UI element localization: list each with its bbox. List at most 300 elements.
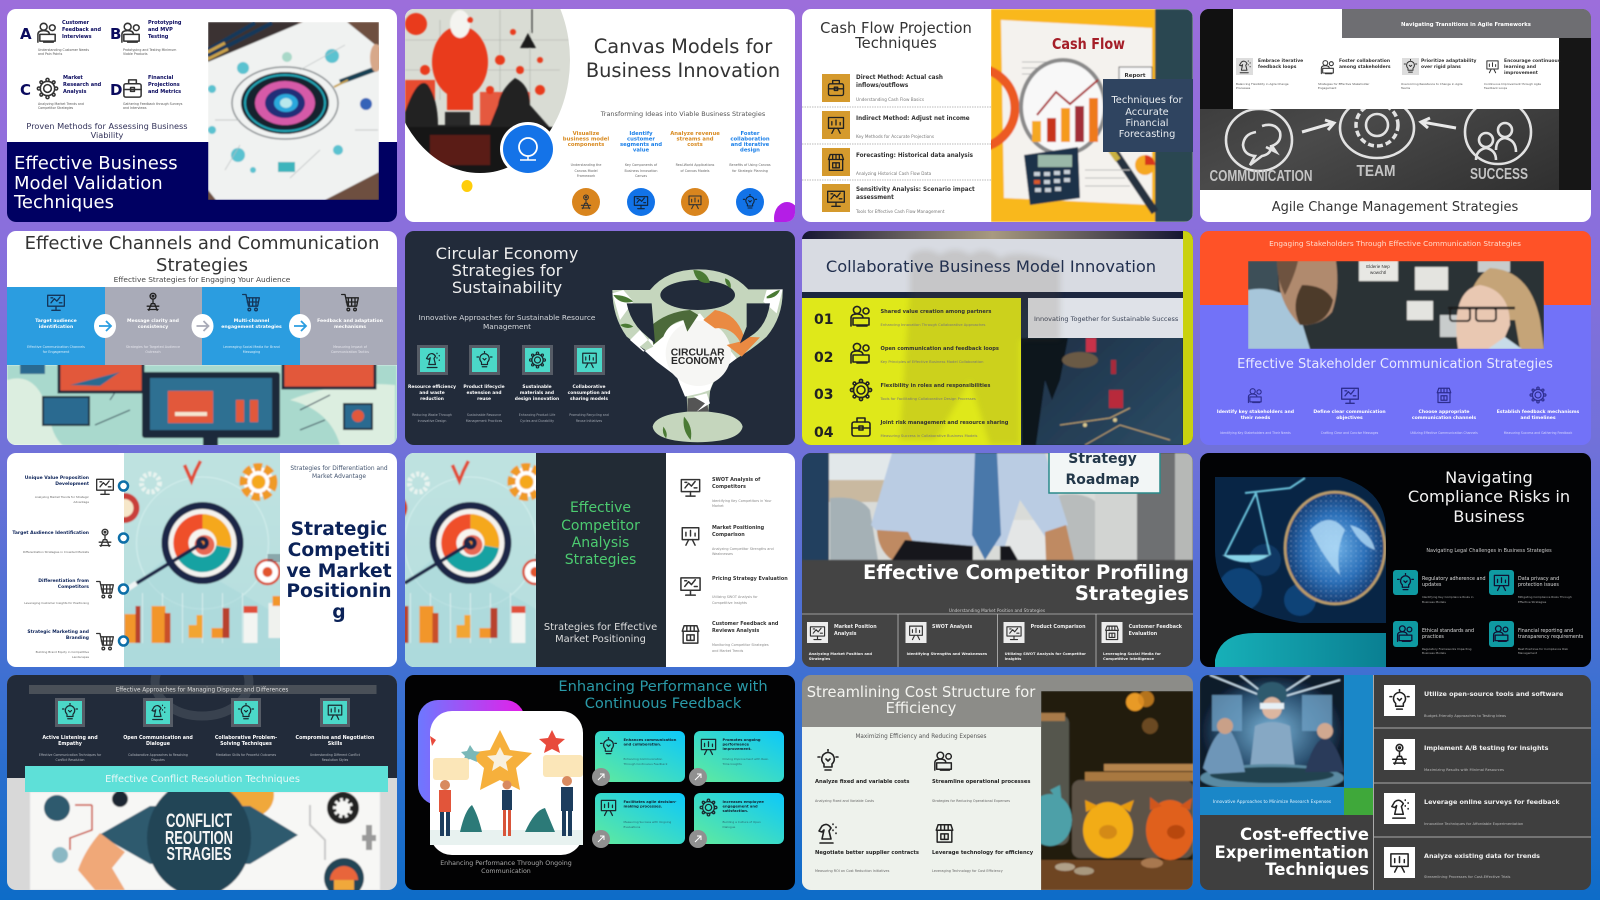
column: analyze: of Canvas Models: [680, 169, 710, 173]
option D: and Metrics: [148, 89, 181, 95]
caption: Communication: [481, 868, 531, 875]
chart heading: Cash Flow: [1052, 35, 1125, 53]
card: increases engagement: Dialogue: [722, 825, 736, 829]
chart: circular economy trophy: [612, 269, 783, 442]
title: Agile Change Management Strategies: [1272, 200, 1519, 215]
column: product comparison: Insights: [1005, 657, 1022, 661]
item: ethical standards: practices: [1422, 634, 1444, 640]
option C: Research and: [63, 82, 102, 88]
item: regulatory adherence: Business Models: [1422, 600, 1446, 604]
item: prioritize adaptability: [1400, 58, 1477, 90]
callout box: Financial: [1126, 118, 1168, 129]
item: product lifecycle: Management Practices: [466, 419, 503, 423]
item: financial reporting: transparency requirements: [1518, 634, 1584, 640]
row 03: Flexibility in roles and responsibilities: [880, 383, 990, 389]
column: analyze: [670, 131, 720, 216]
subtitle: Market Positioning: [555, 634, 646, 645]
item: data privacy: Effective Strategies: [1518, 600, 1547, 604]
title: Competiti: [288, 540, 390, 561]
poster headline: CONFLICT: [166, 811, 232, 832]
item: active listening: Empathy: [58, 741, 83, 747]
item: target audience: Target Audience Identification: [12, 530, 89, 536]
title: Effective Channels and Communication: [25, 233, 379, 254]
item: open communication: [123, 698, 193, 762]
item: market positioning: Analyzing Competitor Strengths and: [712, 547, 774, 551]
row 03: Tools for Facilitating Collaborative Design Processes: [880, 397, 976, 401]
chart: circular economy trophy: CIRCULAR: [671, 347, 725, 358]
column: analyze: Real-World Applications: [676, 163, 714, 167]
column: visualize: [563, 131, 609, 216]
blue side column: [1344, 675, 1374, 788]
option A: A: [20, 25, 32, 43]
item: embrace feedback: Embrace iterative: [1258, 59, 1303, 64]
item: strategic marketing: Branding: [66, 635, 89, 641]
option B: [110, 20, 182, 56]
item: leverage technology: [932, 825, 1034, 873]
dark top section: [7, 675, 397, 778]
subtitle: Management: [483, 322, 531, 331]
callout: strategy roadmap: Strategy: [1068, 451, 1137, 467]
item: identify: Identifying Key Stakeholders and Their Needs: [1220, 431, 1291, 435]
chalk words: COMMUNICATION: [1210, 168, 1312, 185]
item: target audience: Differentiation Strategies in Crowded Markets: [23, 550, 89, 554]
callout: strategy roadmap: Roadmap: [1066, 472, 1139, 488]
title: g: [332, 602, 346, 623]
item: pricing: Utilizing SWOT Analysis for: [712, 595, 758, 599]
card: facilitates decision-making: Measuring Success with Ongoing: [624, 820, 671, 824]
photo: chalkboard communication team success: [1200, 9, 1591, 190]
panel: cost-effective experimentation techniques: [1200, 675, 1591, 890]
item: swot: [681, 477, 772, 508]
title: Strategies: [565, 552, 636, 568]
item: establish: Measuring Success and Gathering Feedback: [1504, 431, 1572, 435]
item: define: Crafting Clear and Concise Messages: [1321, 431, 1379, 435]
card: facilitates decision-making: Facilitates agile decision-: [624, 800, 676, 804]
item: resource efficiency: and waste: [419, 390, 445, 396]
panel: effective competitor analysis strategies: [377, 448, 795, 673]
item: customer feedback: Reviews Analysis: [712, 628, 759, 634]
title: Sustainability: [452, 278, 562, 297]
item: embrace feedback: feedback loops: [1258, 64, 1297, 70]
card: increases engagement: Increases employee: [722, 800, 764, 804]
item: analyze costs: Analyze fixed and variable costs: [815, 779, 909, 785]
row: forecasting: Forecasting: Historical data analysis: [856, 153, 974, 159]
item: customer feedback: Monitoring Competitor Strategies: [712, 643, 769, 647]
panel: effective competitor profiling strategies: [802, 450, 1193, 667]
illustration: team around a star: [430, 711, 583, 855]
item: sustainable materials: Cycles and Durability: [520, 419, 554, 423]
item: analyze data: Streamlining Processes for Cost-Effective Trials: [1424, 875, 1511, 879]
poster headline: STRAGIES: [166, 844, 232, 864]
photo: scales and digital globe: [1215, 477, 1386, 623]
row: forecasting: Analyzing Historical Cash Flow Data: [856, 171, 932, 176]
item: regulatory adherence: updates: [1422, 582, 1442, 588]
step: message clarity: Strategies for Targeted Audience: [126, 345, 180, 349]
photo: target sketch on paper: [208, 22, 382, 200]
item: resource efficiency: [408, 345, 456, 423]
subtitle: Effective Strategies for Engaging Your Audience: [114, 275, 291, 284]
panel: effective business model validation techniques: [7, 9, 397, 222]
step: message clarity: Outreach: [145, 350, 161, 354]
row: forecasting: [822, 148, 974, 176]
header band: [1342, 9, 1591, 38]
item: online surveys: Leverage online surveys for feedback: [1424, 798, 1560, 806]
option B: and MVP: [148, 27, 173, 33]
item: collaborative problem solving: [215, 698, 277, 757]
item: negotiate contracts: Negotiate better supplier contracts: [815, 850, 919, 856]
title: Experimentation: [1214, 843, 1369, 862]
item: continuous learning: Encourage continuous: [1504, 59, 1560, 64]
option B: B: [110, 25, 121, 43]
item: collaborative consumption: [568, 345, 610, 423]
panel: circular economy strategies: [405, 231, 795, 445]
title: Business Innovation: [586, 59, 780, 82]
item: collaborative problem solving: Solving Techniques: [220, 741, 272, 747]
item: streamline operations: Streamline operational processes: [932, 779, 1030, 785]
board note text: Elderie Nep: [1366, 264, 1390, 269]
item: sustainable materials: materials and: [520, 390, 554, 396]
crowd silhouette overlay: [900, 250, 1060, 445]
item: open-source tools: [1384, 685, 1564, 718]
card: increases engagement: satisfaction.: [722, 809, 749, 813]
item: establish: Establish feedback mechanisms: [1497, 410, 1579, 415]
item: sustainable materials: Sustainable: [522, 385, 552, 390]
option B: Prototyping: [148, 20, 181, 26]
photo: businessman leaning on a table: [802, 453, 1193, 560]
item: analyze costs: [815, 749, 909, 803]
accent: purple corner: [774, 202, 795, 222]
card: facilitates decision-making: making processes.: [624, 804, 663, 808]
title: Cost-effective: [1240, 825, 1369, 844]
item: prioritize adaptability: Prioritize adaptability: [1421, 59, 1476, 64]
column: market position: Analysis: [834, 631, 857, 637]
card: promotes improvement: Promotes ongoing: [722, 738, 761, 742]
row 03: 03: [814, 387, 833, 403]
title: Collaborative Business Model Innovation: [826, 257, 1156, 276]
item: product lifecycle: Product lifecycle: [463, 385, 505, 390]
item: product lifecycle: [463, 345, 505, 423]
row 01: Shared value creation among partners: [880, 309, 991, 315]
item: define: objectives: [1336, 415, 1363, 421]
item: ab testing: Implement A/B testing for insights: [1424, 744, 1549, 752]
title: Model Validation: [14, 173, 163, 194]
column: market position: Strategies: [809, 657, 831, 661]
option D: D: [110, 81, 122, 99]
item: financial reporting: [1489, 621, 1584, 655]
title: Positionin: [286, 581, 392, 602]
title: Enhancing Performance with: [558, 678, 768, 695]
column: identify: Business Innovation: [624, 169, 658, 173]
item: define: Define clear communication: [1313, 410, 1386, 415]
row: sensitivity analysis: assessment: [856, 195, 894, 201]
header band: Navigating Transitions in Agile Frameworks: [1401, 22, 1531, 28]
card: enhances communication: Enhances communication: [624, 738, 676, 742]
card: promotes improvement: [689, 731, 784, 786]
caption: Enhancing Performance Through Ongoing: [440, 860, 572, 867]
title: Techniques: [13, 192, 114, 213]
card: promotes improvement: Time Insights: [722, 762, 742, 766]
step: target audience: Target audience: [35, 319, 77, 324]
row 02: 02: [814, 350, 833, 366]
item: product lifecycle: reuse: [477, 396, 491, 402]
row: direct method: [822, 74, 943, 102]
item: sustainable materials: [515, 345, 559, 423]
card: facilitates decision-making: Evaluations: [624, 825, 641, 829]
card: increases engagement: [689, 793, 784, 848]
item: product lifecycle: Sustainable Resource: [467, 413, 501, 417]
subtitle: Strategies for Differentiation and: [290, 466, 388, 472]
illustration: red bulb and team: [405, 9, 570, 173]
column: swot: [906, 622, 988, 656]
step: target audience: identification: [39, 324, 73, 330]
illustration: target and bars: [110, 448, 292, 673]
item: continuous learning: [1484, 58, 1561, 90]
card: promotes improvement: Driving Improvement with Real-: [722, 757, 769, 761]
item: embrace feedback: [1236, 58, 1303, 90]
column: analyze: streams and: [676, 136, 714, 142]
column: customer feedback: [1102, 622, 1183, 661]
item: streamline operations: Strategies for Reducing Operational Expenses: [932, 799, 1010, 803]
column: visualize: business model: [563, 136, 609, 142]
option D: Financial: [148, 75, 173, 81]
column: identify: value: [633, 148, 650, 154]
tagline box: Innovating Together for Sustainable Success: [1034, 315, 1179, 323]
option A: [20, 20, 101, 56]
title: Strategic: [291, 519, 387, 540]
option A: Feedback and: [62, 27, 101, 33]
column: visualize: components: [568, 142, 604, 148]
title: Efficiency: [886, 700, 957, 717]
item: market positioning: [682, 525, 774, 556]
item: embrace feedback: Balancing Flexibility in Agile Change: [1236, 82, 1289, 86]
blue caption band: [1200, 787, 1344, 815]
item: market positioning: Market Positioning: [712, 525, 764, 531]
option D: and Interviews: [123, 106, 147, 110]
item: pricing: Pricing Strategy Evaluation: [712, 576, 788, 582]
item: regulatory adherence: [1393, 570, 1486, 604]
item: open-source tools: Budget-Friendly Approaches to Testing Ideas: [1424, 714, 1506, 718]
title: Business: [1453, 507, 1525, 526]
item: online surveys: [1384, 793, 1560, 826]
item: unique value proposition: Analyzing Market Trends for Strategic: [35, 495, 89, 499]
photo: cash flow report and magnifier: [991, 9, 1193, 222]
illustration: target and bars: [377, 448, 560, 673]
title: Strategies for: [452, 261, 563, 280]
column: product comparison: Product Comparison: [1031, 624, 1086, 630]
column: market position: Market Position: [834, 625, 877, 630]
row: direct method: Understanding Cash Flow Basics: [856, 97, 924, 102]
poster headline: [165, 811, 233, 864]
item: differentiation: Competitors: [58, 584, 89, 590]
blue caption band: Innovative Approaches to Minimize Research Expenses: [1213, 799, 1332, 805]
subtitle: Maximizing Efficiency and Reducing Expenses: [856, 734, 987, 740]
title: Techniques: [854, 35, 937, 52]
row: indirect method: [822, 111, 970, 139]
item: choose: Choose appropriate: [1418, 410, 1470, 415]
item: strategic marketing: [27, 629, 128, 659]
item: prioritize adaptability: Teams: [1400, 86, 1411, 90]
item: ab testing: Maximizing Results with Minimal Resources: [1424, 768, 1504, 772]
illustration: conflict resolution poster: [30, 773, 380, 898]
column: customer feedback: Evaluation: [1129, 631, 1158, 637]
option B: Viable Products: [123, 52, 148, 56]
item: active listening: Active Listening and: [42, 736, 98, 741]
report tag: Report: [1124, 73, 1146, 79]
item: collaborative consumption: Collaborative: [573, 385, 605, 390]
item: identify: Identify key stakeholders and: [1217, 410, 1294, 415]
step: message clarity: consistency: [138, 324, 168, 330]
item: ethical standards: [1393, 621, 1474, 655]
item: active listening: Conflict Resolution: [56, 758, 84, 762]
light content area: [802, 727, 1041, 890]
option C: Market: [63, 75, 83, 81]
column: product comparison: [1004, 622, 1086, 661]
step: multi-channel: engagement strategies: [221, 324, 282, 330]
column: analyze: costs: [687, 142, 703, 148]
title: Techniques: [1265, 860, 1369, 879]
item: continuous learning: Feedback Loops: [1484, 86, 1508, 90]
item: choose: Utilizing Effective Communication Channels: [1410, 431, 1478, 435]
title: Continuous Feedback: [585, 695, 742, 712]
title: Effective Business: [14, 153, 178, 174]
item: strategic marketing: Building Brand Equity in Competitive: [36, 650, 89, 654]
step: target audience: [27, 295, 85, 354]
card: increases engagement: engagement and: [722, 804, 758, 808]
item: resource efficiency: Resource efficiency: [408, 385, 456, 390]
item: compromise and negotiation: Skills: [328, 741, 342, 747]
column: customer feedback: Customer Feedback: [1129, 625, 1182, 630]
option A: Interviews: [62, 34, 92, 40]
arrow: step 3 to 4: [289, 314, 311, 338]
subtitle: Navigating Legal Challenges in Business Strategies: [1426, 548, 1552, 554]
panel: navigating compliance risks in business: [1200, 453, 1591, 667]
board note text: wowchtl: [1370, 270, 1386, 275]
title: Effective: [570, 500, 631, 516]
dark title column: [536, 453, 666, 667]
tagline box: [1028, 298, 1183, 338]
title: Effective Stakeholder Communication Strategies: [1237, 357, 1553, 372]
item: continuous learning: Continuous Improvement through Agile: [1484, 82, 1541, 86]
item: compromise and negotiation: Understanding Different Conflict: [310, 753, 360, 757]
photo: team and network board: [1021, 292, 1183, 445]
row: indirect method: Key Methods for Accurate Projections: [856, 134, 934, 139]
column: visualize: Visualize: [573, 131, 599, 137]
item: leverage technology: Leveraging Technology for Cost Efficiency: [932, 869, 1003, 873]
teal accent shape: [1215, 633, 1386, 667]
column: market position: [807, 622, 877, 661]
item: swot: SWOT Analysis of: [712, 477, 760, 483]
callout: strategy roadmap: [1049, 450, 1160, 493]
row 01: [814, 306, 991, 328]
row: direct method: inflows/outflows: [856, 83, 909, 89]
subtitle: Innovative Approaches for Sustainable Resource: [419, 313, 595, 322]
column: foster: for Strategic Planning: [732, 169, 768, 173]
subtitle bar: Effective Approaches for Managing Disputes and Differences: [116, 688, 288, 694]
item: analyze data: [1384, 847, 1540, 879]
item: differentiation: [24, 578, 128, 605]
panel: effective stakeholder communication strategies: [1200, 231, 1591, 445]
arrow: step 1 to 2: [94, 314, 116, 338]
subtitle: Transforming Ideas into Viable Business Strategies: [600, 110, 766, 118]
orange header: [1200, 231, 1591, 305]
white content card: [1233, 9, 1559, 109]
item: market positioning: Comparison: [712, 532, 745, 538]
item: open communication: Collaborative Approaches to Resolving: [128, 753, 188, 757]
panel: effective channels and communication strategies: [7, 231, 397, 453]
item: sustainable materials: design innovation: [515, 396, 559, 402]
item: resource efficiency: Reducing Waste Through: [412, 413, 452, 417]
row 02: [814, 343, 999, 366]
item: online surveys: Innovative Techniques for Affordable Experimentation: [1424, 822, 1524, 826]
item: regulatory adherence: Identifying Key Compliance Risks in: [1422, 595, 1473, 599]
item: choose: communication channels: [1412, 415, 1476, 421]
card: enhances communication: and collaboration.: [624, 742, 662, 746]
row: indirect method: Indirect Method: Adjust net income: [856, 116, 970, 122]
item: collaborative problem solving: Collaborative Problem-: [215, 736, 277, 741]
item: pricing: Competitive Insights: [712, 601, 747, 605]
item: open-source tools: Utilize open-source tools and software: [1424, 690, 1564, 698]
item: strategic marketing: Landscapes: [72, 655, 89, 659]
column: foster: [729, 131, 771, 216]
row 02: Key Principles of Effective Business Model Collaboration: [880, 360, 984, 364]
item: strategic marketing: Strategic Marketing and: [27, 630, 89, 635]
column: foster: collaboration: [730, 136, 770, 142]
title: Effective Competitor Profiling: [863, 561, 1189, 584]
column: visualize: Understanding the: [571, 163, 601, 167]
item: data privacy: [1489, 570, 1572, 604]
item: active listening: [39, 698, 102, 762]
panel: streamlining cost structure for efficiency: [802, 675, 1194, 890]
item: collaborative problem solving: Mediation Skills for Peaceful Outcomes: [216, 753, 276, 757]
item: negotiate contracts: Measuring ROI on Cost Reduction Initiatives: [815, 869, 890, 873]
step: message clarity: Message clarity and: [127, 319, 179, 324]
item: differentiation: Differentiation from: [38, 579, 89, 584]
column: foster: and iterative: [731, 142, 770, 148]
item: collaborative consumption: Promoting Recycling and: [569, 413, 609, 417]
subtitle: Strategies for Effective: [544, 622, 657, 633]
column: foster: design: [740, 148, 760, 154]
title: Canvas Models for: [594, 35, 772, 58]
item: differentiation: Leveraging Customer Insights for Positioning: [24, 601, 89, 605]
column: swot: SWOT Analysis: [932, 624, 972, 630]
option D: Gathering Feedback through Surveys: [123, 102, 182, 106]
option B: Prototyping and Testing Minimum: [123, 48, 176, 52]
item: unique value proposition: Unique Value Proposition: [25, 476, 89, 481]
card: increases engagement: Building a Culture of Open: [722, 820, 761, 824]
photo: piggy banks in jars: [1028, 691, 1194, 890]
option A: Understanding Customer Needs: [38, 48, 89, 52]
item: financial reporting: Best Practices for Compliance Risk: [1518, 647, 1568, 651]
purple backdrop: [418, 700, 525, 805]
column: foster: Benefits of Using Canvas: [729, 163, 771, 167]
item: foster collaboration: Engagement: [1318, 86, 1337, 90]
item: define: [1313, 388, 1386, 435]
item: swot: Competitors: [712, 484, 746, 490]
item: unique value proposition: [25, 475, 128, 504]
item: ethical standards: Ethical standards and: [1422, 629, 1474, 634]
column: swot: Identifying Strengths and Weaknesses: [907, 652, 988, 656]
step: feedback: Communication Tactics: [331, 350, 369, 354]
title band: [7, 142, 397, 222]
item: foster collaboration: Strategies for Effective Stakeholder: [1318, 82, 1369, 86]
panel: strategic competitive market positioning: [7, 448, 397, 673]
option C: Competitor Strategies: [38, 106, 74, 110]
item: product lifecycle: extension and: [466, 390, 502, 396]
panel: agile change management strategies: [1200, 9, 1591, 222]
item: continuous learning: learning and: [1504, 64, 1536, 70]
subtitle: Market Advantage: [312, 474, 366, 480]
yellow accent strip: [1183, 231, 1193, 445]
